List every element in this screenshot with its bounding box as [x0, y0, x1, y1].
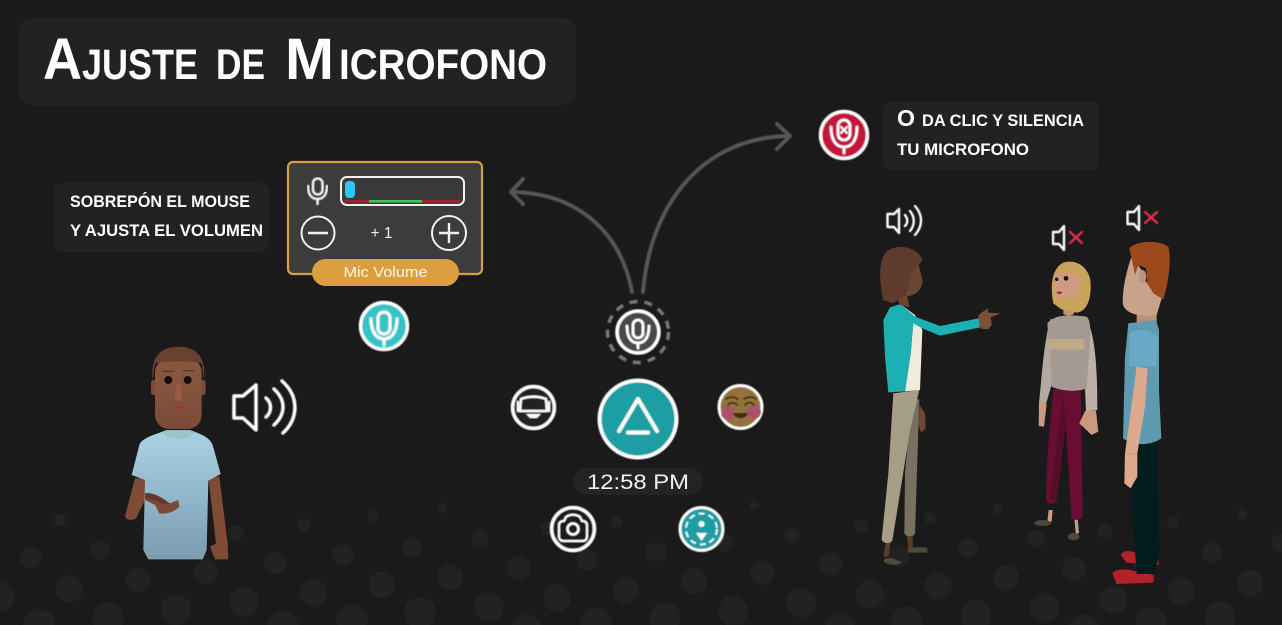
icon: headset button	[512, 386, 554, 428]
icon: selected microphone button	[608, 302, 668, 362]
icon: large speaker	[234, 381, 295, 433]
callout: adjust volume	[54, 183, 269, 252]
plus button	[432, 216, 466, 250]
main menu button	[600, 380, 676, 458]
icon: speaker muted 2	[1128, 206, 1157, 230]
callout: adjust volume: Y AJUSTA EL VOLUMEN	[70, 222, 263, 240]
callout: mute: O	[897, 105, 915, 131]
icon: camera button	[552, 508, 594, 550]
callout: mute: DA CLIC Y SILENCIA	[922, 112, 1084, 130]
icon: location button	[680, 508, 723, 550]
icon: teal microphone button	[360, 302, 408, 350]
arrow: to mute	[643, 124, 790, 292]
title: M	[285, 27, 334, 92]
icon: speaker muted 1	[1053, 226, 1082, 250]
avatar: woman in teal pointing	[880, 247, 1001, 565]
icon: red muted microphone	[820, 112, 868, 158]
time label: 12:58 PM	[587, 470, 689, 494]
icon: speaker on	[888, 206, 921, 235]
label pill: Mic Volume	[344, 265, 428, 281]
callout: mute: TU MICROFONO	[897, 141, 1029, 159]
avatar: woman with blonde hair	[1034, 262, 1098, 540]
value: + 1	[371, 225, 392, 242]
title: JUSTE	[82, 41, 198, 89]
arrow: to mic volume	[511, 179, 632, 292]
title: DE	[216, 41, 265, 89]
title: ICROFONO	[339, 41, 547, 89]
time label	[573, 468, 703, 495]
avatar: man with red hair	[1112, 242, 1170, 584]
title panel	[19, 18, 576, 105]
label pill	[312, 259, 459, 286]
volume slider	[341, 177, 464, 205]
panel: mic volume	[288, 162, 482, 286]
callout: adjust volume: SOBREPÓN EL MOUSE	[70, 192, 250, 211]
avatar: man in blue shirt	[125, 347, 228, 559]
callout: mute	[883, 101, 1099, 170]
icon: microphone	[308, 178, 327, 204]
icon: emoji button	[719, 386, 762, 428]
title: A	[43, 27, 82, 92]
minus button	[302, 216, 334, 250]
